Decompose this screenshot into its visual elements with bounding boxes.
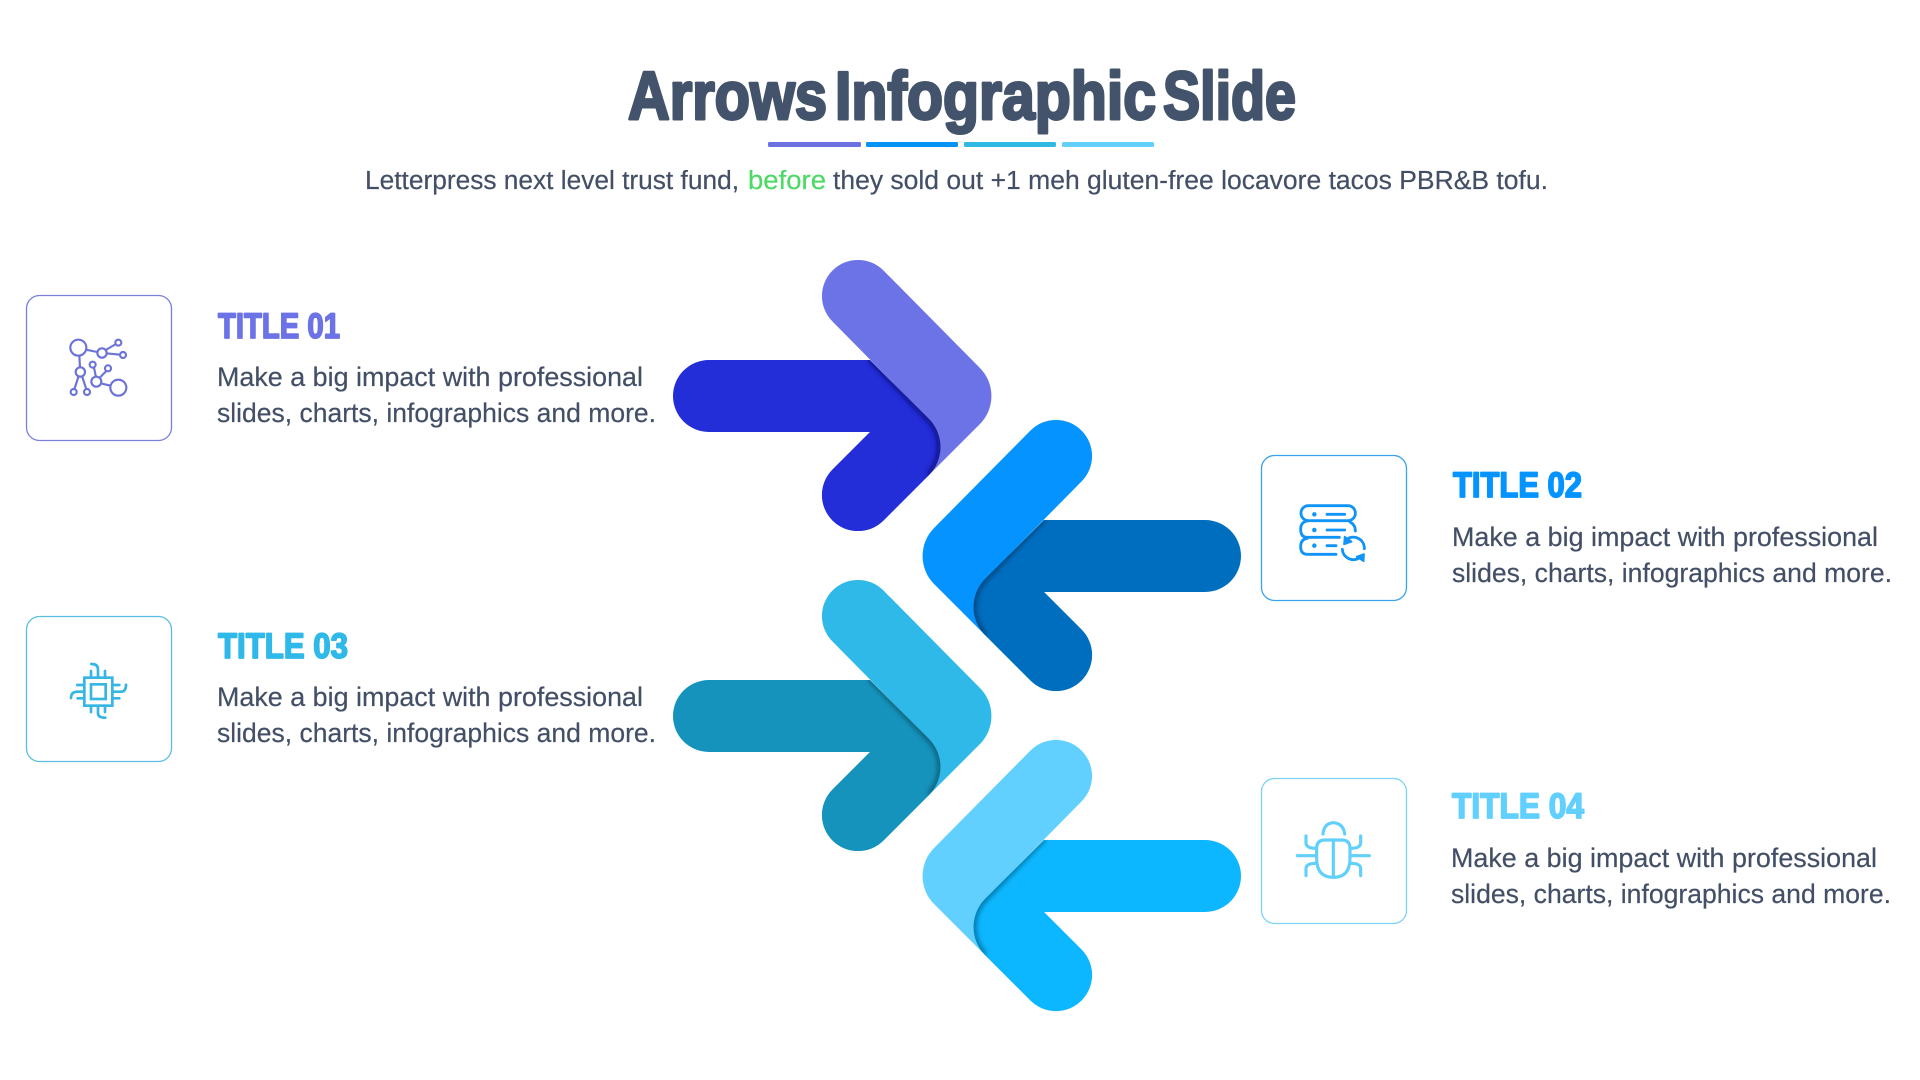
text block 01: slides, charts, infographics and more. bbox=[217, 398, 656, 428]
icon card 04 bbox=[1262, 778, 1406, 924]
text block 01 bbox=[217, 362, 656, 428]
title bbox=[628, 58, 1296, 134]
title underline bars bbox=[768, 142, 1154, 147]
panel: item 03 bbox=[26, 616, 656, 762]
panel: item 01 bbox=[26, 296, 656, 440]
icon card 02 bbox=[1262, 456, 1406, 600]
text block 03: Make a big impact with professional bbox=[217, 682, 643, 712]
arrow 02 bbox=[923, 420, 1241, 691]
arrow 04 bbox=[923, 740, 1241, 1011]
title: Infographic bbox=[835, 58, 1156, 134]
title: Slide bbox=[1163, 58, 1296, 134]
title: Arrows bbox=[628, 58, 827, 134]
text block 04: slides, charts, infographics and more. bbox=[1451, 879, 1891, 909]
icon: microchip bbox=[71, 664, 126, 718]
heading 03: TITLE 03 bbox=[218, 627, 348, 666]
text block 01: Make a big impact with professional bbox=[217, 362, 643, 392]
text block 03 bbox=[217, 682, 656, 748]
text block 02: slides, charts, infographics and more. bbox=[1452, 558, 1892, 588]
arrow 03 bbox=[673, 580, 991, 851]
subtitle: they sold out +1 meh gluten-free locavore tacos PBR&B tofu. bbox=[833, 167, 1548, 195]
heading 01: TITLE 01 bbox=[218, 307, 340, 346]
text block 03: slides, charts, infographics and more. bbox=[217, 718, 656, 748]
icon: bug bbox=[1297, 823, 1369, 877]
arrow 01 bbox=[673, 260, 991, 531]
panel: item 02 bbox=[1262, 456, 1892, 600]
icon card 01 bbox=[26, 296, 172, 440]
subtitle: before bbox=[748, 167, 826, 195]
text block 02: Make a big impact with professional bbox=[1452, 522, 1878, 552]
icon card 03 bbox=[26, 616, 172, 762]
subtitle: Letterpress next level trust fund, bbox=[365, 167, 739, 195]
heading 04: TITLE 04 bbox=[1452, 787, 1584, 826]
text block 04: Make a big impact with professional bbox=[1451, 843, 1877, 873]
panel: item 04 bbox=[1262, 778, 1891, 924]
text block 02 bbox=[1452, 522, 1892, 588]
subtitle bbox=[365, 167, 1548, 195]
icon: server refresh bbox=[1301, 506, 1364, 561]
text block 04 bbox=[1451, 843, 1891, 909]
icon: network nodes bbox=[70, 340, 126, 396]
heading 02: TITLE 02 bbox=[1453, 466, 1582, 505]
